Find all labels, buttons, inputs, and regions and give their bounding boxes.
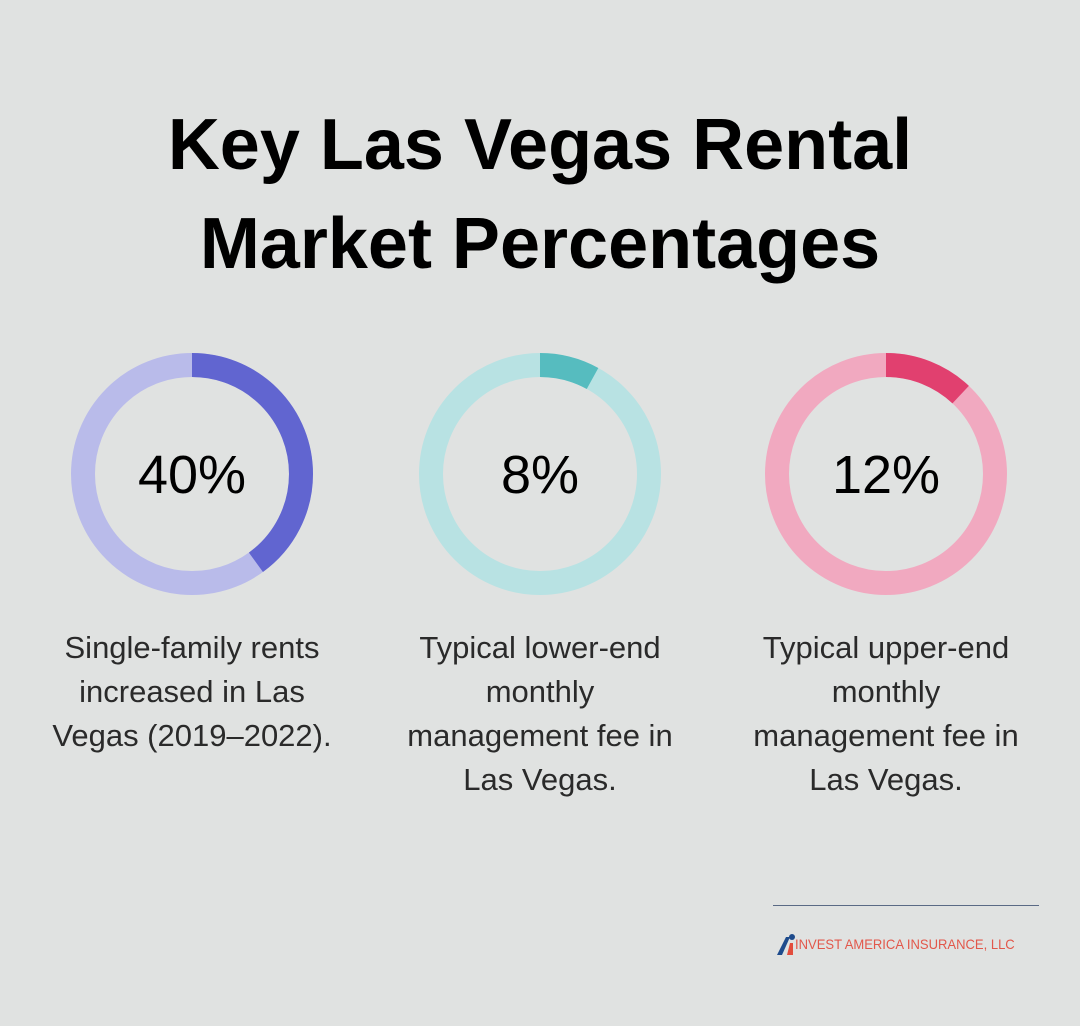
logo: INVEST AMERICA INSURANCE, LLC: [795, 936, 1015, 952]
label: 8%: management fee in: [407, 718, 673, 753]
donut: 12%: [777, 365, 995, 583]
label: 12%: [753, 630, 1019, 797]
donut: 8%: 8%: [501, 445, 579, 505]
label: 8%: Las Vegas.: [463, 762, 617, 797]
label: 40%: Single-family rents: [64, 630, 319, 665]
donut: 40%: [83, 365, 301, 583]
label: 40%: [52, 630, 332, 753]
donut: 8%: [431, 365, 649, 583]
label: 8%: [407, 630, 673, 797]
title: Market Percentages: [200, 204, 880, 284]
donut: 12%: 12%: [832, 445, 940, 505]
title: [168, 105, 912, 284]
icon: logo mark: [777, 934, 795, 955]
label: 40%: Vegas (2019–2022).: [52, 718, 332, 753]
label: 12%: management fee in: [753, 718, 1019, 753]
logo: [773, 905, 1039, 955]
donut: 40%: 40%: [138, 445, 246, 505]
label: 8%: monthly: [486, 674, 594, 709]
label: 12%: Las Vegas.: [809, 762, 963, 797]
title: Key Las Vegas Rental: [168, 105, 912, 185]
label: 8%: Typical lower-end: [419, 630, 661, 665]
label: 12%: Typical upper-end: [763, 630, 1009, 665]
label: 12%: monthly: [832, 674, 940, 709]
label: 40%: increased in Las: [79, 674, 305, 709]
